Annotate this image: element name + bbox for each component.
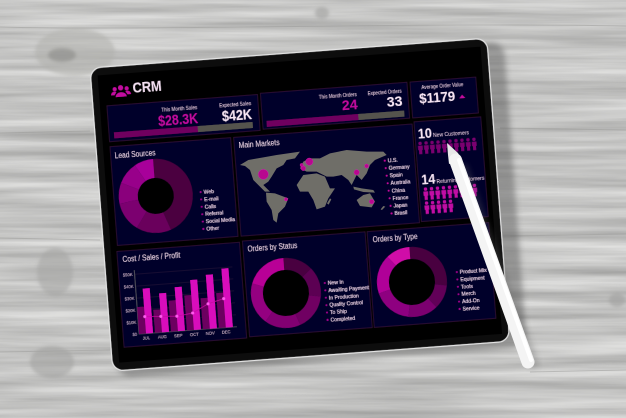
line: profit [142,297,226,320]
donut: lead sources [126,166,185,225]
legend: orders by status: Awaiting Payment [328,285,370,294]
bar chart [135,268,233,334]
month labels: OCT [190,332,199,337]
month labels: NOV [206,330,215,336]
legend: orders by status: Completed [330,316,356,324]
panel: average order value [410,77,478,118]
chart axis: $40K [124,284,134,290]
panel: lead sources [110,138,238,245]
panel: customers: 14 [421,170,436,187]
legend: orders by status: To Ship [330,309,347,316]
panel: cost sales profit [117,242,247,347]
chart axis: $50K [123,272,133,278]
legend: orders by type: Add-On [462,298,480,305]
legend: lead sources: Referral [205,211,224,218]
legend: orders by status: In Production [329,293,359,302]
panel: average order value: Average Order Value [421,82,464,91]
panel: orders by status: Orders by Status [247,241,298,254]
legend: orders by type: Merch [461,291,476,298]
panel: main markets: Main Markets [238,138,280,150]
legend: markets: Brasil [394,210,408,217]
chart axis: $20K [125,308,136,314]
panel: customers: Returning Customers [436,176,485,185]
header [110,78,162,98]
legend: lead sources: Web [203,189,214,196]
panel: sales KPI: This Month Sales [161,105,198,114]
legend: markets: Germany [389,164,410,172]
panel: sales KPI [107,95,260,142]
legend: orders by type: Equipment [460,275,486,283]
legend: lead sources: Calls [205,204,217,211]
panel: sales KPI: $42K [221,106,253,125]
panel: orders KPI: 33 [386,93,403,110]
chart axis: $0 [132,332,138,337]
pencil [447,143,535,367]
legend: markets: Australia [391,179,411,187]
icons: new customers [418,137,477,154]
panel: average order value: $1179 [419,88,456,106]
legend: orders by status [324,278,372,324]
legend: lead sources: Social Media [206,217,235,225]
icons: returning customers [423,184,479,214]
donut: orders by type [381,251,443,313]
legend: orders by type [456,268,490,313]
screen [98,47,502,363]
world map [240,150,387,223]
legend: orders by status: New In [328,280,344,287]
panel: orders by type: Orders by Type [372,232,418,244]
panel: orders KPI [260,82,410,129]
legend: orders by type: Product Mix [460,268,487,276]
panel: main markets [234,124,420,236]
legend: lead sources [199,188,236,233]
legend: orders by type: Service [462,305,480,313]
tablet dashboard [90,38,510,371]
panel: orders KPI: This Month Orders [319,92,357,101]
month labels: JUL [143,335,151,341]
legend: lead sources: E-mail [204,196,219,203]
legend: markets: Spain [390,172,403,179]
panel: orders KPI: Expected Orders [368,89,402,97]
chart axis: $10K [126,320,137,325]
panel: sales KPI: Expected Sales [219,101,252,109]
month labels: SEP [174,333,183,338]
panel: orders by status [242,232,373,337]
legend: orders by status: Quality Control [329,300,363,309]
month labels [143,329,231,341]
month labels: DEC [222,329,231,335]
panel: sales KPI: $28.3K [158,110,199,130]
legend: lead sources: Other [206,226,220,233]
legend: markets: China [391,188,405,195]
chart axis: $30K [124,296,135,302]
tablet body [90,38,510,371]
panel: customers: New Customers [433,130,469,139]
tablet shadow [95,41,527,377]
panel: customers [414,117,488,222]
legend: markets: Japan [393,203,408,210]
legend: markets: France [392,195,409,202]
panel: cost sales profit: Cost / Sales / Profit [122,251,181,264]
panel: lead sources: Lead Sources [114,148,156,160]
donut: orders by status [255,262,317,324]
legend: markets: U.S. [388,158,398,164]
month labels: AUG [158,334,167,340]
panel: orders by type [367,223,496,327]
icon: people [110,84,131,97]
legend: orders by type: Tools [461,284,474,291]
panel: customers: 10 [417,125,433,142]
legend: markets [384,157,414,218]
title: CRM [132,78,162,97]
chart axis [123,272,138,337]
panel: orders KPI: 24 [341,96,358,113]
